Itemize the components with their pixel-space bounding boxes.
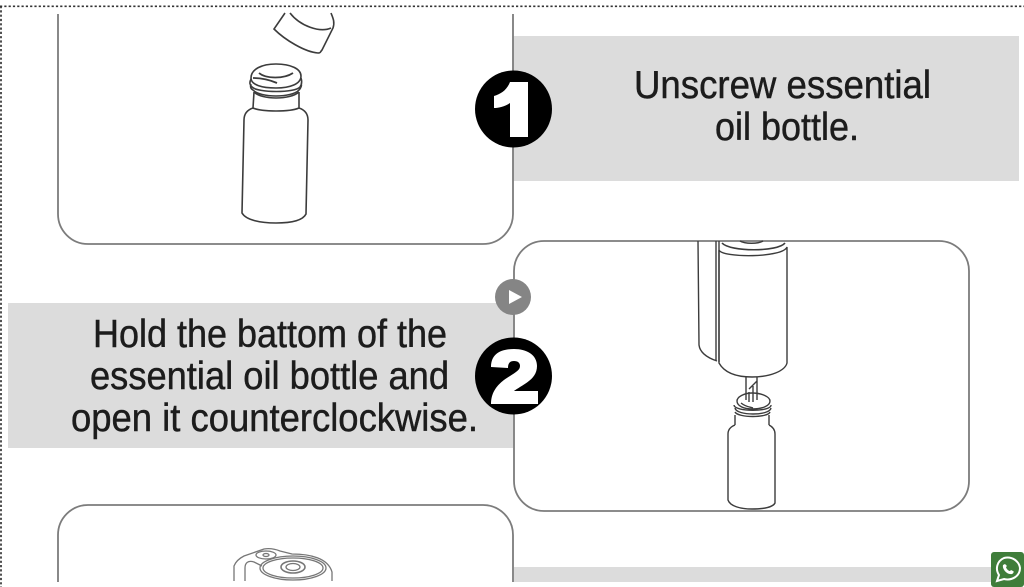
- icon: whatsapp button: [991, 552, 1024, 587]
- icon: bottle cap: [274, 13, 334, 53]
- number 2: [491, 349, 538, 404]
- panel: step 2 instruction: [8, 303, 513, 448]
- text: step 2 instruction: Hold the battom of the: [93, 313, 447, 356]
- panel: step 1 instruction: [513, 36, 1019, 181]
- text: step 1 instruction: [634, 64, 931, 149]
- icon: small oil bottle: [728, 393, 775, 509]
- icon: number 2 badge: [475, 338, 552, 414]
- icon: play button: [495, 279, 531, 315]
- text: step 2 instruction: essential oil bottle and: [90, 355, 449, 398]
- text: step 1 instruction: Unscrew essential: [634, 64, 931, 107]
- panel: step 2 illustration: [514, 241, 969, 511]
- icon: diffuser device: [698, 241, 787, 402]
- panel: step 3 illustration: [58, 505, 513, 582]
- icon: open bottle: [242, 64, 308, 223]
- text: step 2 instruction: [71, 313, 478, 440]
- panel: step 1 illustration: [58, 13, 513, 244]
- text: step 2 instruction: open it counterclockwise.: [71, 397, 478, 440]
- panel: step 3 instruction strip: [514, 567, 991, 582]
- icon: diffuser top: [234, 549, 332, 581]
- icon: number 1 badge: [475, 70, 552, 148]
- number 1: [494, 82, 528, 137]
- text: step 1 instruction: oil bottle.: [715, 106, 859, 149]
